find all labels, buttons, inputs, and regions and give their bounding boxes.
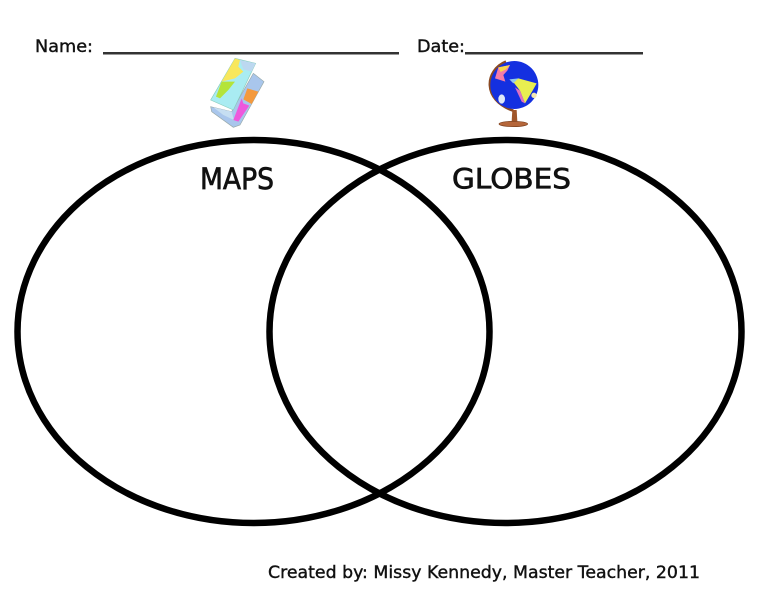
credit line: Created by: Missy Kennedy, Master Teacher, 2011 [268, 563, 700, 583]
heading: globes: GLOBES [452, 162, 571, 195]
icon: desk globe [490, 61, 538, 127]
heading: maps: MAPS [200, 162, 274, 196]
globe stand [512, 110, 517, 121]
name label: Name: [35, 37, 93, 57]
date label: Date: [417, 37, 465, 57]
date write-in line [465, 52, 643, 54]
name write-in line [103, 52, 399, 54]
icon: folded map [211, 58, 264, 127]
venn circle: globes [270, 140, 742, 523]
venn circle: maps [18, 140, 490, 523]
